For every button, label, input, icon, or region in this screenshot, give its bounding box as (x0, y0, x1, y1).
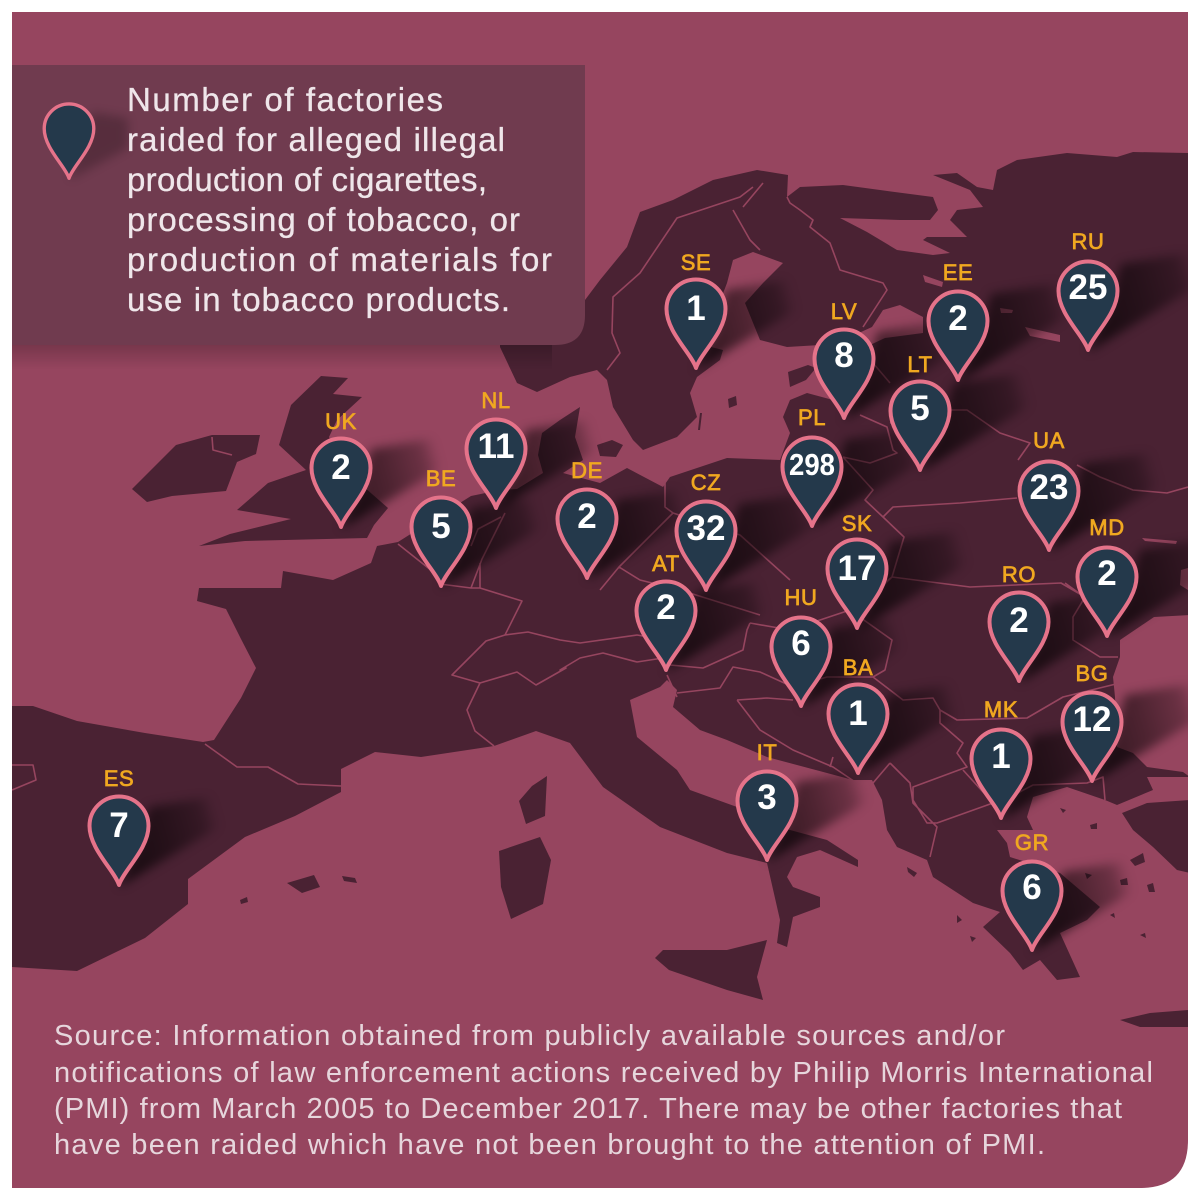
pin: SK 17 (828, 511, 886, 628)
pin: IT 3 (738, 740, 796, 860)
legend text (127, 81, 552, 318)
pin: SE 1: 1 (686, 289, 706, 328)
pin: LV 8: LV (831, 299, 857, 324)
legend text: Number of factories (127, 81, 443, 118)
pin: EE 2: EE (943, 260, 973, 285)
pin: HU 6 (772, 585, 830, 706)
land: mainland Europe (12, 152, 1190, 980)
source note (54, 1020, 1153, 1161)
pin: UA 23: 23 (1030, 468, 1068, 507)
legend text: processing of tobacco, or (127, 201, 520, 238)
legend text: production of cigarettes, (127, 161, 487, 198)
pin: MK 1: 1 (991, 737, 1011, 776)
pin: RO 2: RO (1002, 562, 1036, 587)
pin: DE 2 (558, 458, 616, 578)
source note: notifications of law enforcement actions received by Philip Morris International (54, 1057, 1153, 1089)
pin: DE 2: DE (571, 458, 603, 483)
pin: NL 11 (466, 388, 526, 508)
legend text: raided for alleged illegal (127, 121, 505, 158)
map of Europe (12, 152, 1190, 1027)
source note: have been raided which have not been brought to the attention of PMI. (54, 1129, 1045, 1161)
land: Great Britain (199, 376, 388, 546)
land: Baltic islands (597, 365, 816, 457)
legend shadow (12, 345, 552, 369)
pin: SE 1 (666, 250, 726, 368)
pin: EE 2 (928, 260, 988, 380)
pin: CZ 32 (676, 470, 736, 590)
pin: LT 5 (890, 352, 950, 470)
pin: RO 2: 2 (1009, 601, 1029, 640)
source note: Source: Information obtained from publicly available sources and/or (54, 1020, 1005, 1052)
land: Corsica (519, 776, 547, 824)
pin: LT 5: LT (907, 352, 933, 377)
legend text: production of materials for (127, 241, 552, 278)
pin: MK 1: MK (984, 697, 1018, 722)
pin: CZ 32: 32 (687, 509, 725, 548)
pin: AT 2: AT (652, 551, 680, 576)
pin: BG 12: 12 (1073, 700, 1111, 739)
pin: BA 1: 1 (848, 694, 868, 733)
pin: RU 25: 25 (1069, 268, 1107, 307)
pin: UK 2: 2 (331, 448, 351, 487)
pin: HU 6: HU (785, 585, 817, 610)
pin: MD 2: 2 (1097, 554, 1117, 593)
pin shadows (119, 251, 1200, 952)
pin: DE 2: 2 (577, 497, 597, 536)
pin: AT 2: 2 (656, 588, 676, 627)
pin: CZ 32: CZ (691, 470, 721, 495)
pin: BA 1: BA (843, 655, 873, 680)
pin: PL 298: PL (798, 405, 826, 430)
legend background (12, 65, 585, 345)
pin: SE 1: SE (681, 250, 711, 275)
land: Sardinia (499, 837, 551, 919)
pin: BE 5: 5 (431, 507, 451, 546)
source note: (PMI) from March 2005 to December 2017. There may be other factories that (54, 1093, 1122, 1125)
icon: legend pin (44, 104, 94, 178)
pin: NL 11: 11 (478, 427, 514, 466)
legend text: use in tobacco products. (127, 281, 510, 318)
pin: EE 2: 2 (948, 299, 968, 338)
pin: PL 298: 298 (789, 447, 835, 482)
pin: MD 2: MD (1089, 515, 1125, 540)
pin: ES 7: ES (104, 766, 134, 791)
pin: BE 5: BE (426, 466, 456, 491)
pin: UA 23: UA (1033, 428, 1065, 453)
country borders (12, 183, 1188, 857)
pin: GR 6: GR (1015, 830, 1049, 855)
pin: GR 6 (1002, 830, 1062, 950)
pin: ES 7: 7 (109, 806, 129, 845)
pin: RU 25 (1058, 229, 1118, 350)
pin: RU 25: RU (1072, 229, 1104, 254)
land: Anatolia (1122, 800, 1190, 873)
land: Ireland (132, 435, 260, 502)
pin: GR 6: 6 (1022, 868, 1042, 907)
land: Balearic islands (240, 875, 357, 904)
legend panel (12, 65, 585, 369)
land: Sicily (655, 940, 767, 1000)
pin: MK 1 (972, 697, 1030, 818)
legend pin shadow (69, 112, 128, 180)
pin: HU 6: 6 (791, 624, 811, 663)
pin: BG 12: BG (1076, 661, 1108, 686)
pin: UA 23 (1020, 428, 1078, 550)
pin: SK 17: SK (842, 511, 872, 536)
pin: LV 8 (814, 299, 874, 418)
pin: AT 2 (636, 551, 696, 670)
pin: NL 11: NL (481, 388, 511, 413)
pin: IT 3: 3 (757, 778, 777, 817)
pin: BG 12 (1062, 661, 1122, 781)
pin: ES 7 (90, 766, 148, 885)
pin: UK 2 (312, 409, 370, 527)
pin: UK 2: UK (325, 409, 357, 434)
pin: BE 5 (412, 466, 470, 586)
pin: RO 2 (990, 562, 1048, 681)
inland water (923, 275, 1188, 590)
pin: IT 3: IT (757, 740, 777, 765)
pin: LV 8: 8 (834, 336, 854, 375)
pin: PL 298 (782, 405, 842, 526)
pin: LT 5: 5 (910, 389, 930, 428)
land: Crete and Greek islands (907, 808, 1188, 1027)
pin: SK 17: 17 (838, 549, 876, 588)
pin: MD 2 (1078, 515, 1136, 636)
pin: BA 1 (828, 655, 888, 773)
